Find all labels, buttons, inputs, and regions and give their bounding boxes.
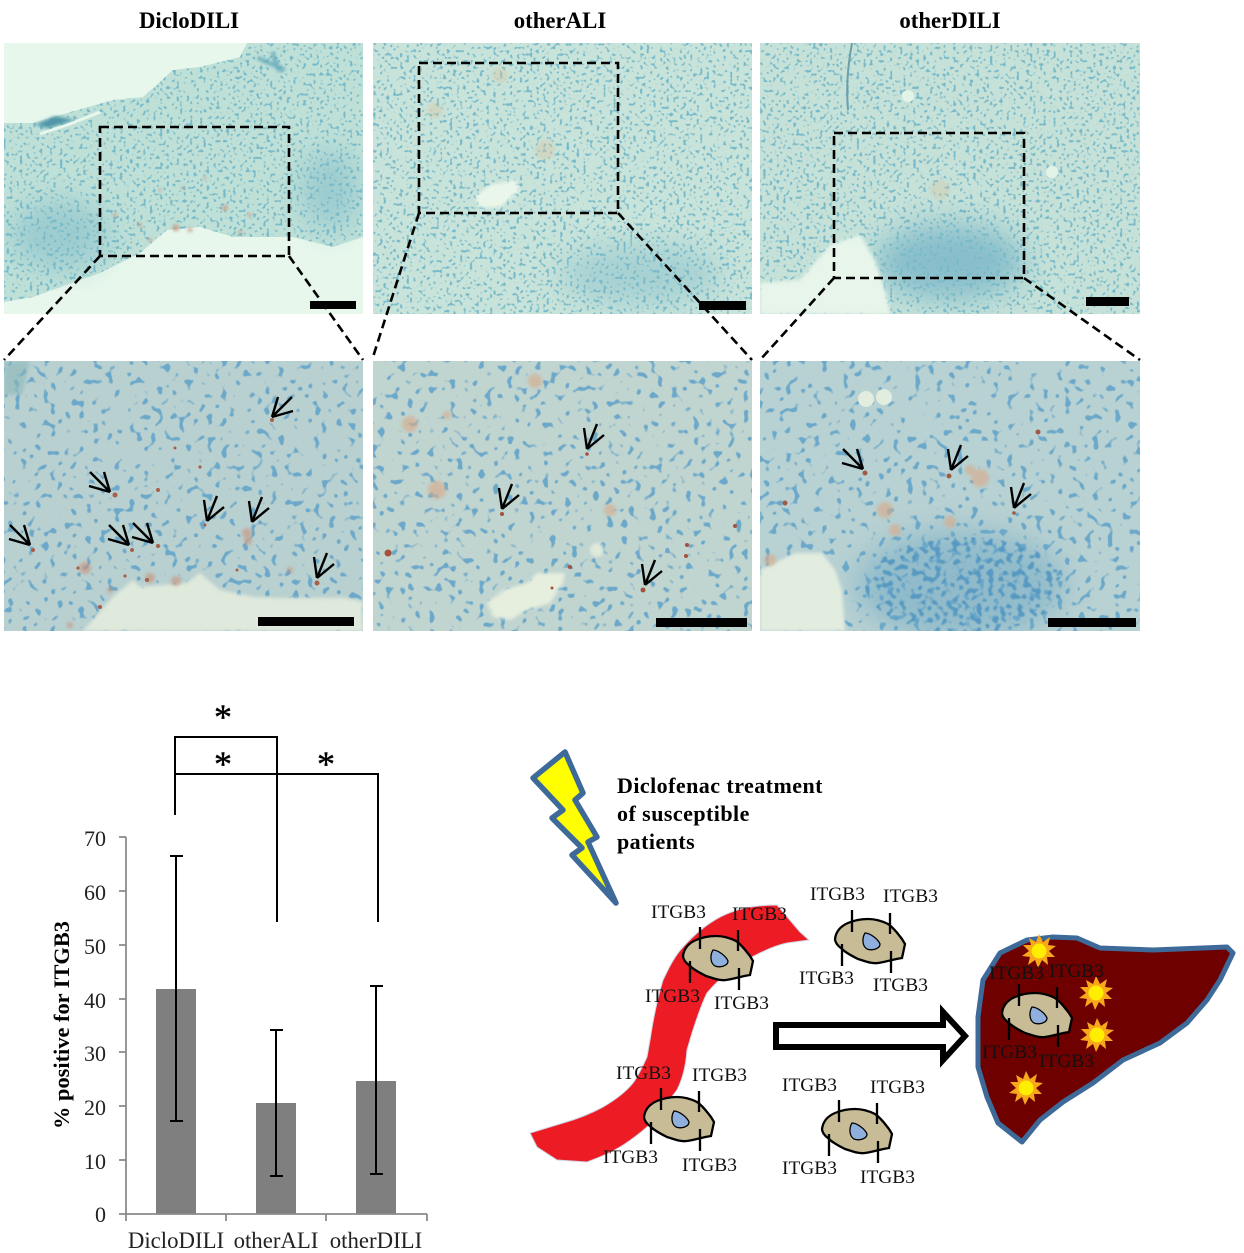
micrograph: otherALI low magnification: [373, 43, 752, 314]
scale bars: [258, 297, 1136, 627]
cell in vessel, lower: ITGB3: [616, 1063, 671, 1084]
cell in vessel, upper: ITGB3: [732, 904, 787, 925]
cell outside vessel, upper: ITGB3: [810, 884, 865, 905]
liver with infiltrating cell and injury stars: ITGB3: [989, 963, 1044, 984]
axes: [119, 837, 427, 1221]
cell in vessel, lower: ITGB3: [692, 1065, 747, 1086]
text: Diclofenac treatment: Diclofenac treatment: [617, 773, 823, 798]
liver with infiltrating cell and injury stars: ITGB3: [982, 1042, 1037, 1063]
title: otherDILI: otherDILI: [899, 8, 1001, 33]
micrograph: otherDILI low magnification: [760, 43, 1140, 314]
x axis category labels: DicloDILI: [128, 1228, 224, 1253]
y axis tick labels: 60: [84, 880, 106, 905]
zoom box: DicloDILI: [4, 127, 363, 360]
micrograph: DicloDILI low magnification: [4, 43, 363, 314]
title: otherALI: otherALI: [514, 8, 606, 33]
arrows: DicloDILI positive cells: [9, 397, 334, 578]
cell in vessel, upper: [645, 902, 787, 1014]
error bars: [170, 856, 383, 1176]
text: Diclofenac treatment: of susceptible: [617, 801, 750, 826]
icon: lightning bolt: [533, 752, 616, 903]
x axis category labels: otherALI: [234, 1228, 318, 1253]
cell in vessel, lower: ITGB3: [603, 1147, 658, 1168]
cell in vessel, upper: ITGB3: [714, 993, 769, 1014]
x axis category labels: [128, 1228, 422, 1253]
cell outside vessel, lower: ITGB3: [860, 1167, 915, 1188]
significance brackets: *: [214, 697, 232, 737]
zoom box: otherDILI: [760, 133, 1140, 360]
cell in vessel, lower: [603, 1063, 747, 1176]
bar chart: percent positive for ITGB3: [49, 826, 427, 1253]
arrows: otherALI positive cells: [499, 424, 662, 585]
y axis tick labels: 20: [84, 1095, 106, 1120]
liver with infiltrating cell and injury stars: ITGB3: [1049, 961, 1104, 982]
y axis tick labels: 50: [84, 934, 106, 959]
zoom box: otherALI: [373, 63, 752, 360]
arrow: to liver: [776, 1012, 965, 1060]
y axis tick labels: 70: [84, 826, 106, 851]
x axis category labels: otherDILI: [330, 1228, 422, 1253]
blood vessel: [530, 905, 809, 1162]
cell in vessel, lower: ITGB3: [682, 1155, 737, 1176]
bars: [156, 989, 396, 1214]
y axis tick labels: 30: [84, 1041, 106, 1066]
liver with infiltrating cell and injury stars: ITGB3: [1039, 1051, 1094, 1072]
cell outside vessel, lower: ITGB3: [782, 1158, 837, 1179]
significance brackets: [175, 697, 378, 922]
y axis title: % positive for ITGB3: [49, 921, 74, 1129]
text: Diclofenac treatment: patients: [617, 829, 695, 854]
cell outside vessel, upper: [799, 884, 938, 996]
y axis tick labels: 0: [95, 1202, 106, 1227]
cell outside vessel, upper: ITGB3: [799, 968, 854, 989]
cell outside vessel, upper: ITGB3: [873, 975, 928, 996]
cell outside vessel, lower: [782, 1075, 925, 1188]
micrograph: otherDILI high magnification: [760, 361, 1140, 640]
y axis tick labels: 10: [84, 1149, 106, 1174]
micrograph: DicloDILI high magnification: [4, 361, 363, 631]
y axis tick labels: 40: [84, 988, 106, 1013]
significance brackets: *: [214, 744, 232, 784]
significance brackets: *: [317, 744, 335, 784]
arrows: otherDILI positive cells: [842, 445, 1031, 508]
cell outside vessel, upper: ITGB3: [883, 886, 938, 907]
cell outside vessel, lower: ITGB3: [870, 1077, 925, 1098]
cell in vessel, upper: ITGB3: [651, 902, 706, 923]
cell in vessel, upper: ITGB3: [645, 986, 700, 1007]
y axis tick labels: [84, 826, 106, 1227]
cell outside vessel, lower: ITGB3: [782, 1075, 837, 1096]
liver with infiltrating cell and injury stars: [978, 934, 1233, 1142]
title: DicloDILI: DicloDILI: [139, 8, 239, 33]
micrograph: otherALI high magnification: [373, 361, 752, 631]
